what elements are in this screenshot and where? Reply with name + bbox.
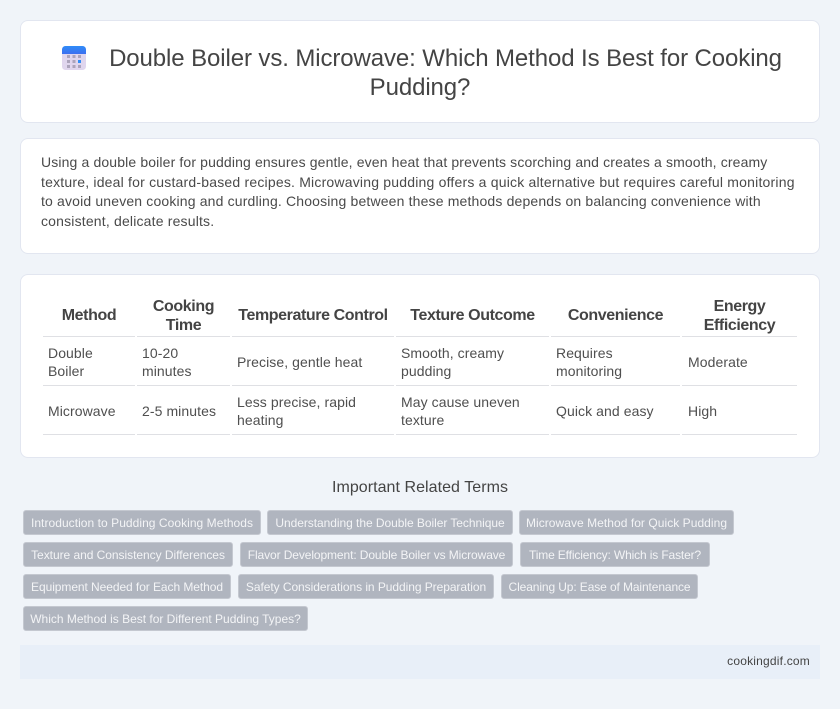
comparison table: pudding <box>401 363 451 379</box>
comparison table: heating <box>237 412 284 428</box>
related term tags: Equipment Needed for Each Method <box>31 580 223 594</box>
title: Pudding? <box>370 74 470 101</box>
related term tags: Cleaning Up: Ease of Maintenance <box>509 580 690 594</box>
comparison table: Cooking <box>153 298 214 315</box>
comparison table: Time <box>166 317 201 334</box>
intro card <box>20 138 820 254</box>
comparison table: texture <box>401 412 444 428</box>
intro paragraph: Using a double boiler for pudding ensures gentle, even heat that prevents scorching and creates a smooth, creamy <box>41 154 767 170</box>
related terms heading: Important Related Terms <box>332 479 508 496</box>
comparison table: Convenience <box>568 307 663 324</box>
comparison table: Double <box>48 345 93 361</box>
comparison table: Efficiency <box>704 317 775 334</box>
comparison table: Smooth, creamy <box>401 345 504 361</box>
comparison table: Requires <box>556 345 613 361</box>
comparison table: 2-5 minutes <box>142 403 216 419</box>
intro paragraph: consistent, delicate results. <box>41 213 214 229</box>
table card <box>20 274 820 458</box>
intro paragraph: to avoid uneven cooking and curdling. Choosing between these methods depends on balancing convenience with <box>41 193 761 209</box>
related term tags: Texture and Consistency Differences <box>31 548 225 562</box>
related term tags: Which Method is Best for Different Pudding Types? <box>30 612 301 626</box>
comparison table: Method <box>62 307 116 324</box>
comparison table: Boiler <box>48 363 84 379</box>
related term tags: Safety Considerations in Pudding Preparation <box>246 580 486 594</box>
comparison table: Less precise, rapid <box>237 394 356 410</box>
comparison table: Energy <box>714 298 765 315</box>
related term tags: Time Efficiency: Which is Faster? <box>529 548 701 562</box>
footer source text: cookingdif.com <box>727 654 810 668</box>
comparison table: May cause uneven <box>401 394 520 410</box>
comparison table: Moderate <box>688 354 748 370</box>
comparison table: Quick and easy <box>556 403 654 419</box>
comparison table: minutes <box>142 363 192 379</box>
comparison table: Microwave <box>48 403 116 419</box>
footer bar <box>20 645 820 679</box>
comparison table: Texture Outcome <box>410 307 535 324</box>
comparison table: 10-20 <box>142 345 178 361</box>
comparison table <box>43 298 797 435</box>
title: Double Boiler vs. Microwave: Which Method Is Best for Cooking <box>109 45 782 72</box>
intro paragraph: texture, ideal for custard-based recipes. Microwaving pudding offers a quick alternative but requires careful monitoring <box>41 174 795 190</box>
title card <box>20 20 820 123</box>
related term tags <box>23 510 734 631</box>
icon: calendar <box>62 46 86 70</box>
title <box>109 45 782 101</box>
comparison table: High <box>688 403 717 419</box>
related term tags: Understanding the Double Boiler Technique <box>275 516 505 530</box>
intro paragraph <box>41 154 795 229</box>
comparison table: Precise, gentle heat <box>237 354 362 370</box>
comparison table: monitoring <box>556 363 622 379</box>
comparison table: Temperature Control <box>238 307 388 324</box>
related term tags: Microwave Method for Quick Pudding <box>526 516 727 530</box>
related term tags: Introduction to Pudding Cooking Methods <box>31 516 253 530</box>
related term tags: Flavor Development: Double Boiler vs Microwave <box>248 548 505 562</box>
